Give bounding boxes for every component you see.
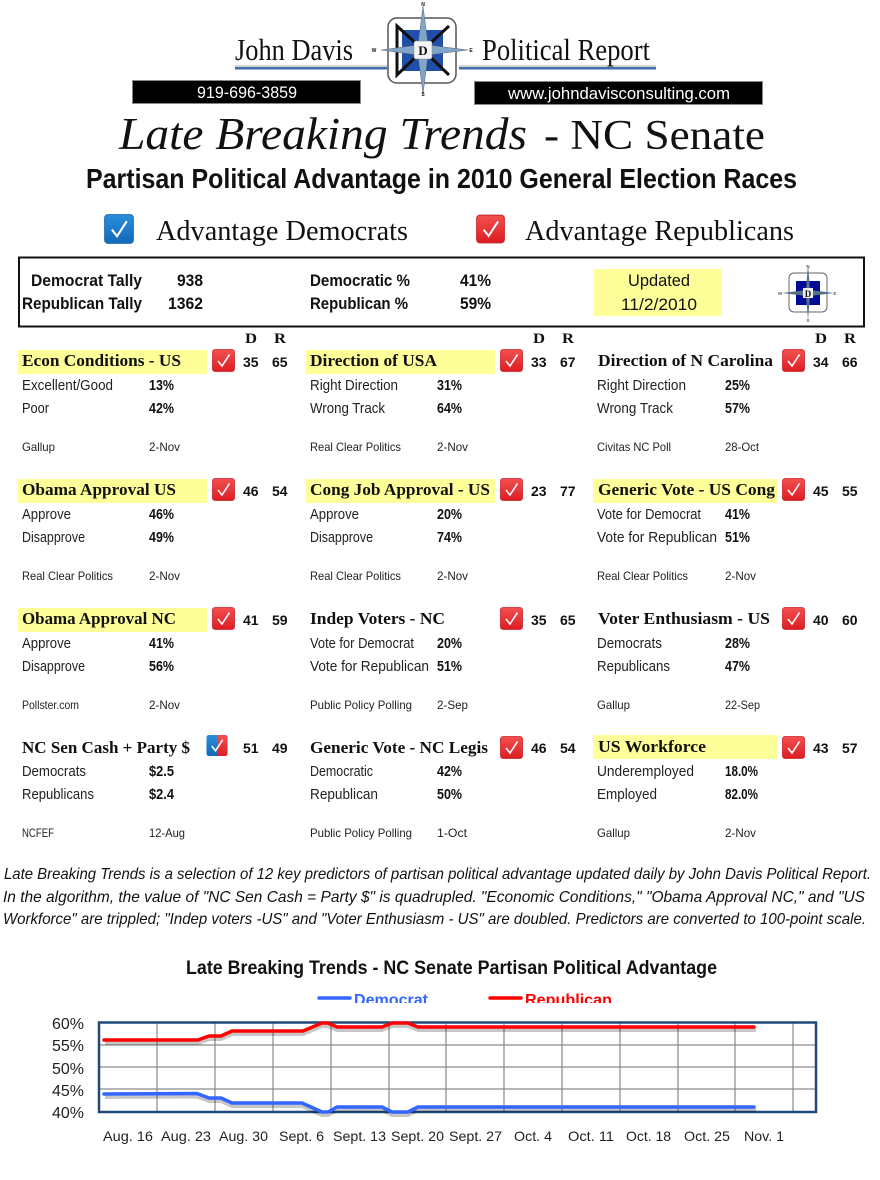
panel: Generic Vote - US Cong — [593, 478, 858, 583]
tally percentages: 41% — [460, 272, 491, 290]
icon: compass logo: E — [469, 48, 473, 54]
panel: Direction of N Carolina: 25% — [725, 378, 750, 394]
panel: Voter Enthusiasm - US: 47% — [725, 659, 750, 675]
panel: NC Sen Cash + Party $: Democrats — [22, 764, 86, 780]
panel: Generic Vote - US Cong: Vote for Republican — [597, 530, 717, 546]
column headers: D and R — [245, 331, 856, 347]
panel: Generic Vote - NC Legis: Democratic — [310, 764, 373, 780]
panel: Obama Approval NC: 59 — [272, 612, 288, 628]
panel: Cong Job Approval - US: Real Clear Politics — [310, 569, 401, 583]
icon: small compass: N — [806, 264, 810, 269]
panel: Generic Vote - NC Legis: 54 — [560, 740, 576, 756]
icon: small compass: S — [806, 318, 810, 323]
panel: Direction of USA: 64% — [437, 401, 462, 417]
panel: Direction of N Carolina: Civitas NC Poll — [597, 440, 671, 454]
panel: Generic Vote - US Cong: Vote for Democrat — [597, 507, 701, 523]
text block: methodology note: In the algorithm, the value of "NC Sen Cash = Party $" is quadrupled. "Economic Conditions," "Obama Approval NC," and "US — [3, 889, 865, 906]
panel: Econ Conditions - US: 2-Nov — [149, 440, 180, 454]
panel: Indep Voters - NC: Public Policy Polling — [310, 698, 412, 712]
title — [118, 109, 765, 159]
updated date callout — [594, 269, 722, 316]
panel: Indep Voters - NC: 20% — [437, 636, 462, 652]
icon: compass logo — [372, 2, 473, 98]
panel: US Workforce: Underemployed — [597, 764, 694, 780]
series: Republican — [104, 1023, 754, 1040]
panel: Obama Approval US: 54 — [272, 483, 288, 499]
y axis labels: 60% — [52, 1016, 84, 1033]
panel: Generic Vote - US Cong: Real Clear Politics — [597, 569, 688, 583]
text block: methodology note — [3, 866, 871, 928]
panel: Direction of USA: Wrong Track — [310, 401, 386, 417]
panel: Direction of N Carolina: Direction of N Carolina — [598, 351, 774, 370]
panel: Voter Enthusiasm - US: Voter Enthusiasm - US — [598, 609, 770, 628]
x axis labels: Oct. 25 — [684, 1128, 730, 1144]
panel: NC Sen Cash + Party $: $2.4 — [149, 787, 174, 803]
subtitle: Partisan Political Advantage in 2010 General Election Races — [86, 163, 797, 194]
panel: US Workforce — [593, 735, 858, 840]
icon: small compass: D — [805, 289, 812, 299]
legend: Advantage Democrats: Advantage Democrats — [156, 215, 408, 247]
icon: small compass: W — [778, 291, 783, 296]
x axis labels: Aug. 16 — [103, 1128, 153, 1144]
x axis labels — [103, 1128, 784, 1144]
panel: Voter Enthusiasm - US: Republicans — [597, 659, 670, 675]
panel: Voter Enthusiasm - US: 28% — [725, 636, 750, 652]
panel: Indep Voters - NC: 51% — [437, 659, 462, 675]
updated date callout: Updated — [628, 271, 690, 290]
tally percentages: 59% — [460, 295, 491, 313]
panel: Voter Enthusiasm - US: 22-Sep — [725, 698, 760, 712]
panel: Direction of USA: 2-Nov — [437, 440, 468, 454]
panel: US Workforce: 57 — [842, 740, 858, 756]
panel: US Workforce: 18.0% — [725, 764, 758, 780]
panel: Cong Job Approval - US: Approve — [310, 507, 359, 523]
panel: Voter Enthusiasm - US: Gallup — [597, 698, 630, 712]
y axis labels: 55% — [52, 1038, 84, 1055]
tally counts — [22, 272, 203, 313]
panel: Direction of USA: Direction of USA — [310, 351, 438, 370]
panel: Generic Vote - NC Legis: Republican — [310, 787, 378, 803]
panel: Obama Approval NC: 56% — [149, 659, 174, 675]
updated date callout: 11/2/2010 — [621, 295, 697, 314]
panel: Cong Job Approval - US — [306, 478, 576, 583]
series shadows — [105, 1026, 756, 1115]
x axis labels: Nov. 1 — [744, 1128, 784, 1144]
panel: Generic Vote - US Cong: 55 — [842, 483, 858, 499]
y axis labels — [52, 1016, 84, 1122]
chart title: Late Breaking Trends - NC Senate Partisan Political Advantage — [186, 957, 717, 979]
panel: Obama Approval NC — [18, 608, 288, 712]
x axis labels: Sept. 27 — [449, 1128, 502, 1144]
panel: Econ Conditions - US: 35 — [243, 354, 259, 370]
contact bar: website — [474, 82, 762, 104]
panel: NC Sen Cash + Party $: Republicans — [22, 787, 94, 803]
x axis labels: Aug. 23 — [161, 1128, 211, 1144]
x axis labels: Oct. 18 — [626, 1128, 671, 1144]
panel: NC Sen Cash + Party $: NCFEF — [22, 826, 54, 840]
icon: small compass: E — [833, 291, 837, 296]
panel: US Workforce: 2-Nov — [725, 826, 756, 840]
x axis labels: Oct. 11 — [568, 1128, 614, 1144]
panel: Indep Voters - NC: 35 — [531, 612, 547, 628]
panel: Obama Approval US: 46 — [243, 483, 259, 499]
panel: Econ Conditions - US: Econ Conditions - US — [22, 351, 181, 370]
panel: Direction of USA: Right Direction — [310, 378, 398, 394]
panel: Cong Job Approval - US: 2-Nov — [437, 569, 468, 583]
panel: Voter Enthusiasm - US — [597, 608, 858, 712]
panel: NC Sen Cash + Party $: $2.5 — [149, 764, 174, 780]
column headers: D and R: R — [562, 331, 574, 347]
x axis labels: Sept. 6 — [279, 1128, 324, 1144]
panel: Obama Approval US: 49% — [149, 530, 174, 546]
panel: Generic Vote - US Cong: 2-Nov — [725, 569, 756, 583]
tally counts: 1362 — [168, 295, 203, 313]
panel: Obama Approval US — [18, 478, 288, 583]
chart legend: Democrat — [319, 992, 429, 1009]
panel: Direction of USA: 67 — [560, 354, 576, 370]
panel: Direction of N Carolina: Wrong Track — [597, 401, 674, 417]
icon: compass logo: S — [421, 92, 425, 98]
panel: Econ Conditions - US: Poor — [22, 401, 49, 417]
panel: Voter Enthusiasm - US: Democrats — [597, 636, 662, 652]
icon: compass logo: N — [421, 2, 425, 8]
panel: Obama Approval US: Obama Approval US — [22, 480, 176, 499]
contact bar: phone: 919-696-3859 — [197, 83, 297, 102]
panel: Generic Vote - US Cong: 51% — [725, 530, 750, 546]
tally percentages: Republican % — [310, 295, 408, 313]
x axis labels: Oct. 4 — [514, 1128, 552, 1144]
panel: Direction of N Carolina — [597, 350, 858, 454]
panel: Obama Approval NC: 41 — [243, 612, 259, 628]
legend: Advantage Republicans: Advantage Republicans — [525, 215, 794, 247]
title: - NC Senate — [544, 113, 765, 159]
panel: Econ Conditions - US: Gallup — [22, 440, 55, 454]
panel: Cong Job Approval - US: 20% — [437, 507, 462, 523]
panel: Econ Conditions - US: Excellent/Good — [22, 378, 113, 394]
x axis labels: Aug. 30 — [219, 1128, 268, 1144]
panel: Generic Vote - US Cong: 41% — [725, 507, 750, 523]
tally counts: Republican Tally — [22, 295, 143, 313]
column headers: D and R: D — [533, 331, 545, 347]
panel: US Workforce: US Workforce — [598, 737, 706, 756]
y axis labels: 40% — [52, 1105, 84, 1122]
icon: compass logo: W — [372, 48, 377, 54]
panel: Indep Voters - NC: Vote for Republican — [310, 659, 429, 675]
panel: Direction of N Carolina: 34 — [813, 354, 829, 370]
panel: Generic Vote - NC Legis — [310, 736, 576, 840]
panel: Obama Approval NC: Obama Approval NC — [22, 609, 176, 628]
panel: Obama Approval US: Real Clear Politics — [22, 569, 113, 583]
panel: Obama Approval NC: Pollster.com — [22, 698, 79, 712]
panel: US Workforce: 82.0% — [725, 787, 758, 803]
panel: tally summary — [19, 258, 864, 326]
panel: Obama Approval NC: Approve — [22, 636, 71, 652]
panel: Econ Conditions - US — [18, 350, 288, 454]
column headers: D and R: D — [815, 331, 827, 347]
panel: Obama Approval NC: 41% — [149, 636, 174, 652]
y axis labels: 45% — [52, 1083, 84, 1100]
panel: Obama Approval US: 2-Nov — [149, 569, 180, 583]
panel: Indep Voters - NC: 2-Sep — [437, 698, 468, 712]
panel: Cong Job Approval - US: 23 — [531, 483, 547, 499]
panel: Obama Approval US: 46% — [149, 507, 174, 523]
panel: Econ Conditions - US: 13% — [149, 378, 174, 394]
panel: Indep Voters - NC — [310, 608, 576, 712]
logo text: John Davis: John Davis — [235, 32, 353, 67]
column headers: D and R: R — [844, 331, 856, 347]
panel: Generic Vote - NC Legis: 42% — [437, 764, 462, 780]
panel: Indep Voters - NC: Indep Voters - NC — [310, 609, 445, 628]
y axis labels: 50% — [52, 1061, 84, 1078]
panel: Direction of N Carolina: 57% — [725, 401, 750, 417]
column headers: D and R: D — [245, 331, 257, 347]
line chart: partisan advantage over time — [52, 1016, 816, 1144]
panel: Econ Conditions - US: 65 — [272, 354, 288, 370]
panel: Generic Vote - NC Legis: 1-Oct — [437, 826, 468, 840]
panel: US Workforce: Employed — [597, 787, 657, 803]
panel: Direction of N Carolina: 66 — [842, 354, 858, 370]
tally percentages: Democratic % — [310, 272, 410, 290]
icon: small compass — [778, 264, 837, 323]
panel: Voter Enthusiasm - US: 40 — [813, 612, 829, 628]
panel: Cong Job Approval - US: 74% — [437, 530, 462, 546]
panel: Obama Approval US: Disapprove — [22, 530, 85, 546]
panel: Generic Vote - NC Legis: 50% — [437, 787, 462, 803]
series: Democrat — [104, 1094, 754, 1112]
panel: Direction of USA: 33 — [531, 354, 547, 370]
panel: Econ Conditions - US: 42% — [149, 401, 174, 417]
panel: Direction of USA: 31% — [437, 378, 462, 394]
panel: Indep Voters - NC: 65 — [560, 612, 576, 628]
panel: Generic Vote - US Cong: 45 — [813, 483, 829, 499]
panel: US Workforce: Gallup — [597, 826, 630, 840]
chart legend: Republican: Republican — [525, 992, 612, 1009]
panel: Obama Approval NC: Disapprove — [22, 659, 85, 675]
panel: Generic Vote - NC Legis: Generic Vote - NC Legis — [310, 738, 488, 757]
panel: Indep Voters - NC: Vote for Democrat — [310, 636, 414, 652]
x axis labels: Sept. 20 — [391, 1128, 444, 1144]
panel: Direction of USA — [306, 350, 576, 454]
panel: Cong Job Approval - US: 77 — [560, 483, 576, 499]
column headers: D and R: R — [274, 331, 286, 347]
panel: US Workforce: 43 — [813, 740, 829, 756]
panel: NC Sen Cash + Party $: 51 — [243, 740, 259, 756]
panel: Obama Approval US: Approve — [22, 507, 71, 523]
panel: NC Sen Cash + Party $: NC Sen Cash + Party $ — [22, 738, 190, 757]
panel: Generic Vote - NC Legis: Public Policy Polling — [310, 826, 412, 840]
panel: Voter Enthusiasm - US: 60 — [842, 612, 858, 628]
panel: Generic Vote - US Cong: Generic Vote - US Cong — [598, 480, 776, 499]
panel: NC Sen Cash + Party $ — [22, 735, 288, 840]
panel: Generic Vote - NC Legis: 46 — [531, 740, 547, 756]
tally percentages — [310, 272, 491, 313]
x axis labels: Sept. 13 — [333, 1128, 386, 1144]
chart legend: Democrat: Democrat — [354, 992, 429, 1009]
tally counts: Democrat Tally — [31, 272, 143, 290]
panel: Cong Job Approval - US: Cong Job Approval - US — [310, 480, 490, 499]
panel: Direction of USA: Real Clear Politics — [310, 440, 401, 454]
header: John Davis Political Report logo — [235, 2, 656, 98]
panel: Cong Job Approval - US: Disapprove — [310, 530, 373, 546]
panel: NC Sen Cash + Party $: 49 — [272, 740, 288, 756]
logo text: Political Report: Political Report — [482, 32, 650, 67]
panel: Direction of N Carolina: Right Direction — [597, 378, 686, 394]
panel: Direction of N Carolina: 28-Oct — [725, 440, 760, 454]
tally counts: 938 — [177, 272, 203, 290]
panel: NC Sen Cash + Party $: 12-Aug — [149, 826, 185, 840]
contact bar: website: www.johndavisconsulting.com — [507, 84, 730, 103]
title: Late Breaking Trends — [118, 109, 527, 159]
panel: Obama Approval NC: 2-Nov — [149, 698, 180, 712]
contact bar: phone — [132, 80, 360, 104]
icon: compass logo: D — [418, 43, 428, 58]
